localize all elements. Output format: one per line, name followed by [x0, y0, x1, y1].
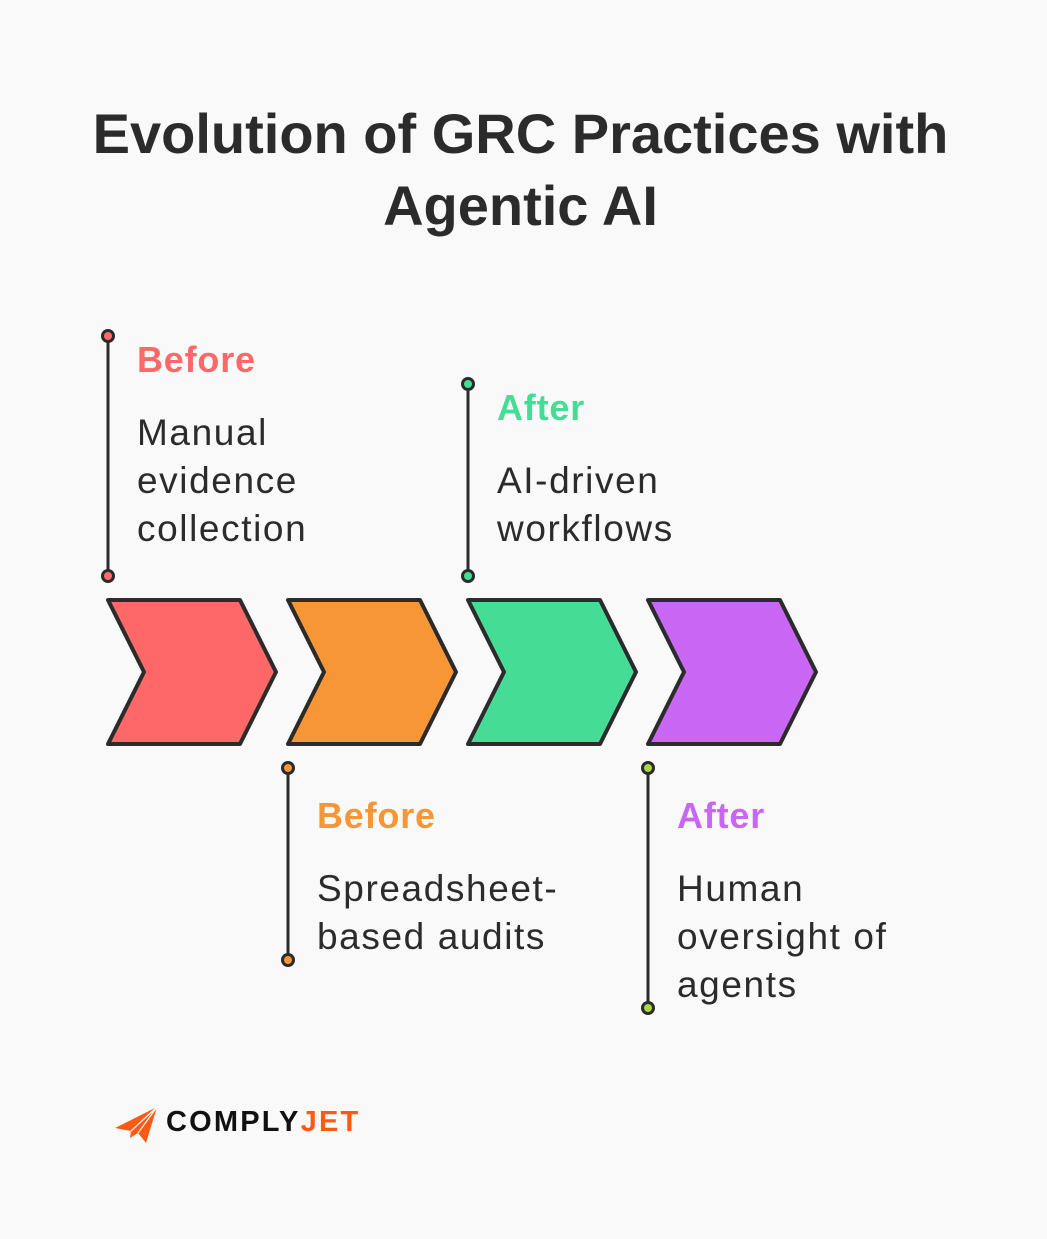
step 2 label: Before: [317, 795, 436, 836]
title: [93, 102, 948, 237]
step 2 label: based audits: [317, 916, 546, 957]
step 2 label: Spreadsheet-: [317, 868, 558, 909]
chevron 4: [648, 600, 816, 744]
title: Agentic AI: [383, 174, 658, 237]
chevron 1: [108, 600, 276, 744]
step 1 label: [137, 339, 307, 549]
step 1 label: collection: [137, 508, 307, 549]
connector: green: [462, 378, 474, 582]
connector: red: [102, 330, 114, 582]
chevron 3: [468, 600, 636, 744]
connector: lime: [642, 762, 654, 1014]
step 3 label: AI-driven: [497, 460, 659, 501]
step 4 label: oversight of: [677, 916, 887, 957]
step 3 label: After: [497, 387, 585, 428]
icon: paper plane: [115, 1108, 157, 1143]
logo: [115, 1106, 360, 1143]
step 1 label: Before: [137, 339, 256, 380]
title: Evolution of GRC Practices with: [93, 102, 948, 165]
step 4 label: After: [677, 795, 765, 836]
step 3 label: workflows: [497, 508, 674, 549]
step 2 label: [317, 795, 558, 957]
step 4 label: [677, 795, 887, 1005]
step 4 label: agents: [677, 964, 798, 1005]
step 1 label: evidence: [137, 460, 298, 501]
wordmark: COMPLYJET: [166, 1106, 360, 1138]
step 1 label: Manual: [137, 412, 268, 453]
step 3 label: [497, 387, 674, 549]
chevron 2: [288, 600, 456, 744]
step 4 label: Human: [677, 868, 804, 909]
connector: orange: [282, 762, 294, 966]
